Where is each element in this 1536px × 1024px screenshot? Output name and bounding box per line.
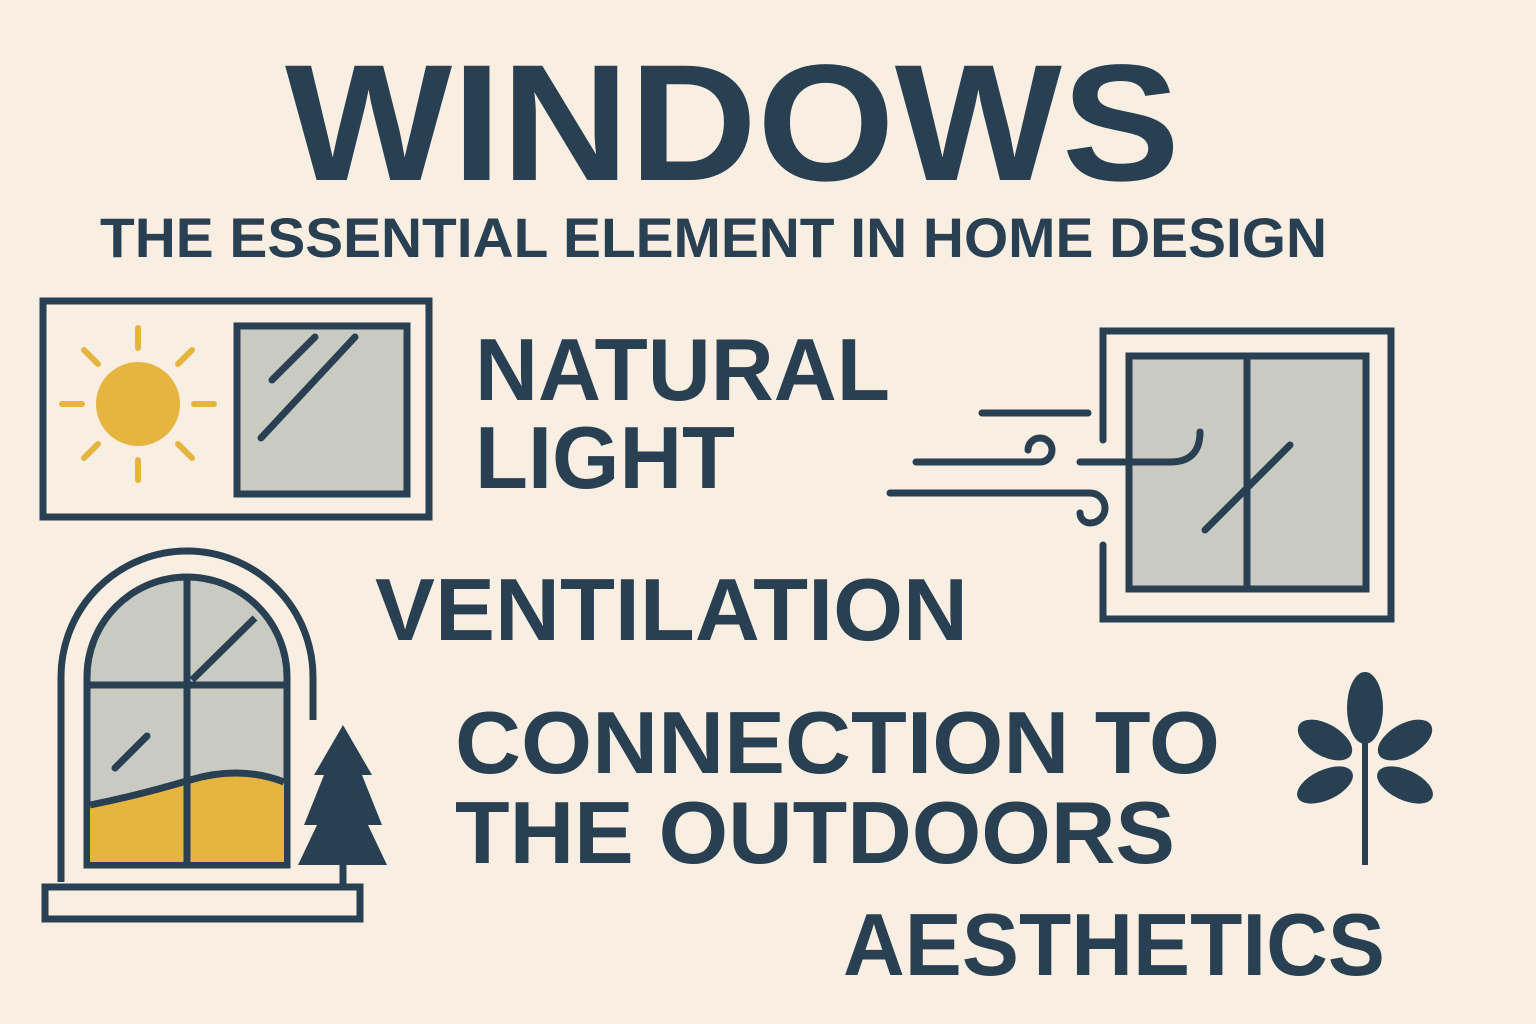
heading: natural light: [475, 320, 890, 507]
title: WINDOWS: [285, 31, 1180, 216]
heading: ventilation: VENTILATION: [375, 560, 968, 659]
heading: natural light: LIGHT: [475, 408, 735, 507]
icon: leaf: [1291, 672, 1439, 865]
subtitle: THE ESSENTIAL ELEMENT IN HOME DESIGN: [100, 206, 1327, 269]
heading: aesthetics: AESTHETICS: [843, 895, 1385, 994]
heading: connection to the outdoors: CONNECTION TO: [455, 693, 1220, 792]
icon: arched window with tree: [45, 551, 387, 919]
icon: window with sun: [43, 301, 429, 517]
heading: connection to the outdoors: [455, 693, 1220, 882]
icon: ventilation window with wind: [890, 331, 1391, 619]
heading: connection to the outdoors: THE OUTDOORS: [455, 783, 1175, 882]
heading: natural light: NATURAL: [475, 320, 890, 419]
